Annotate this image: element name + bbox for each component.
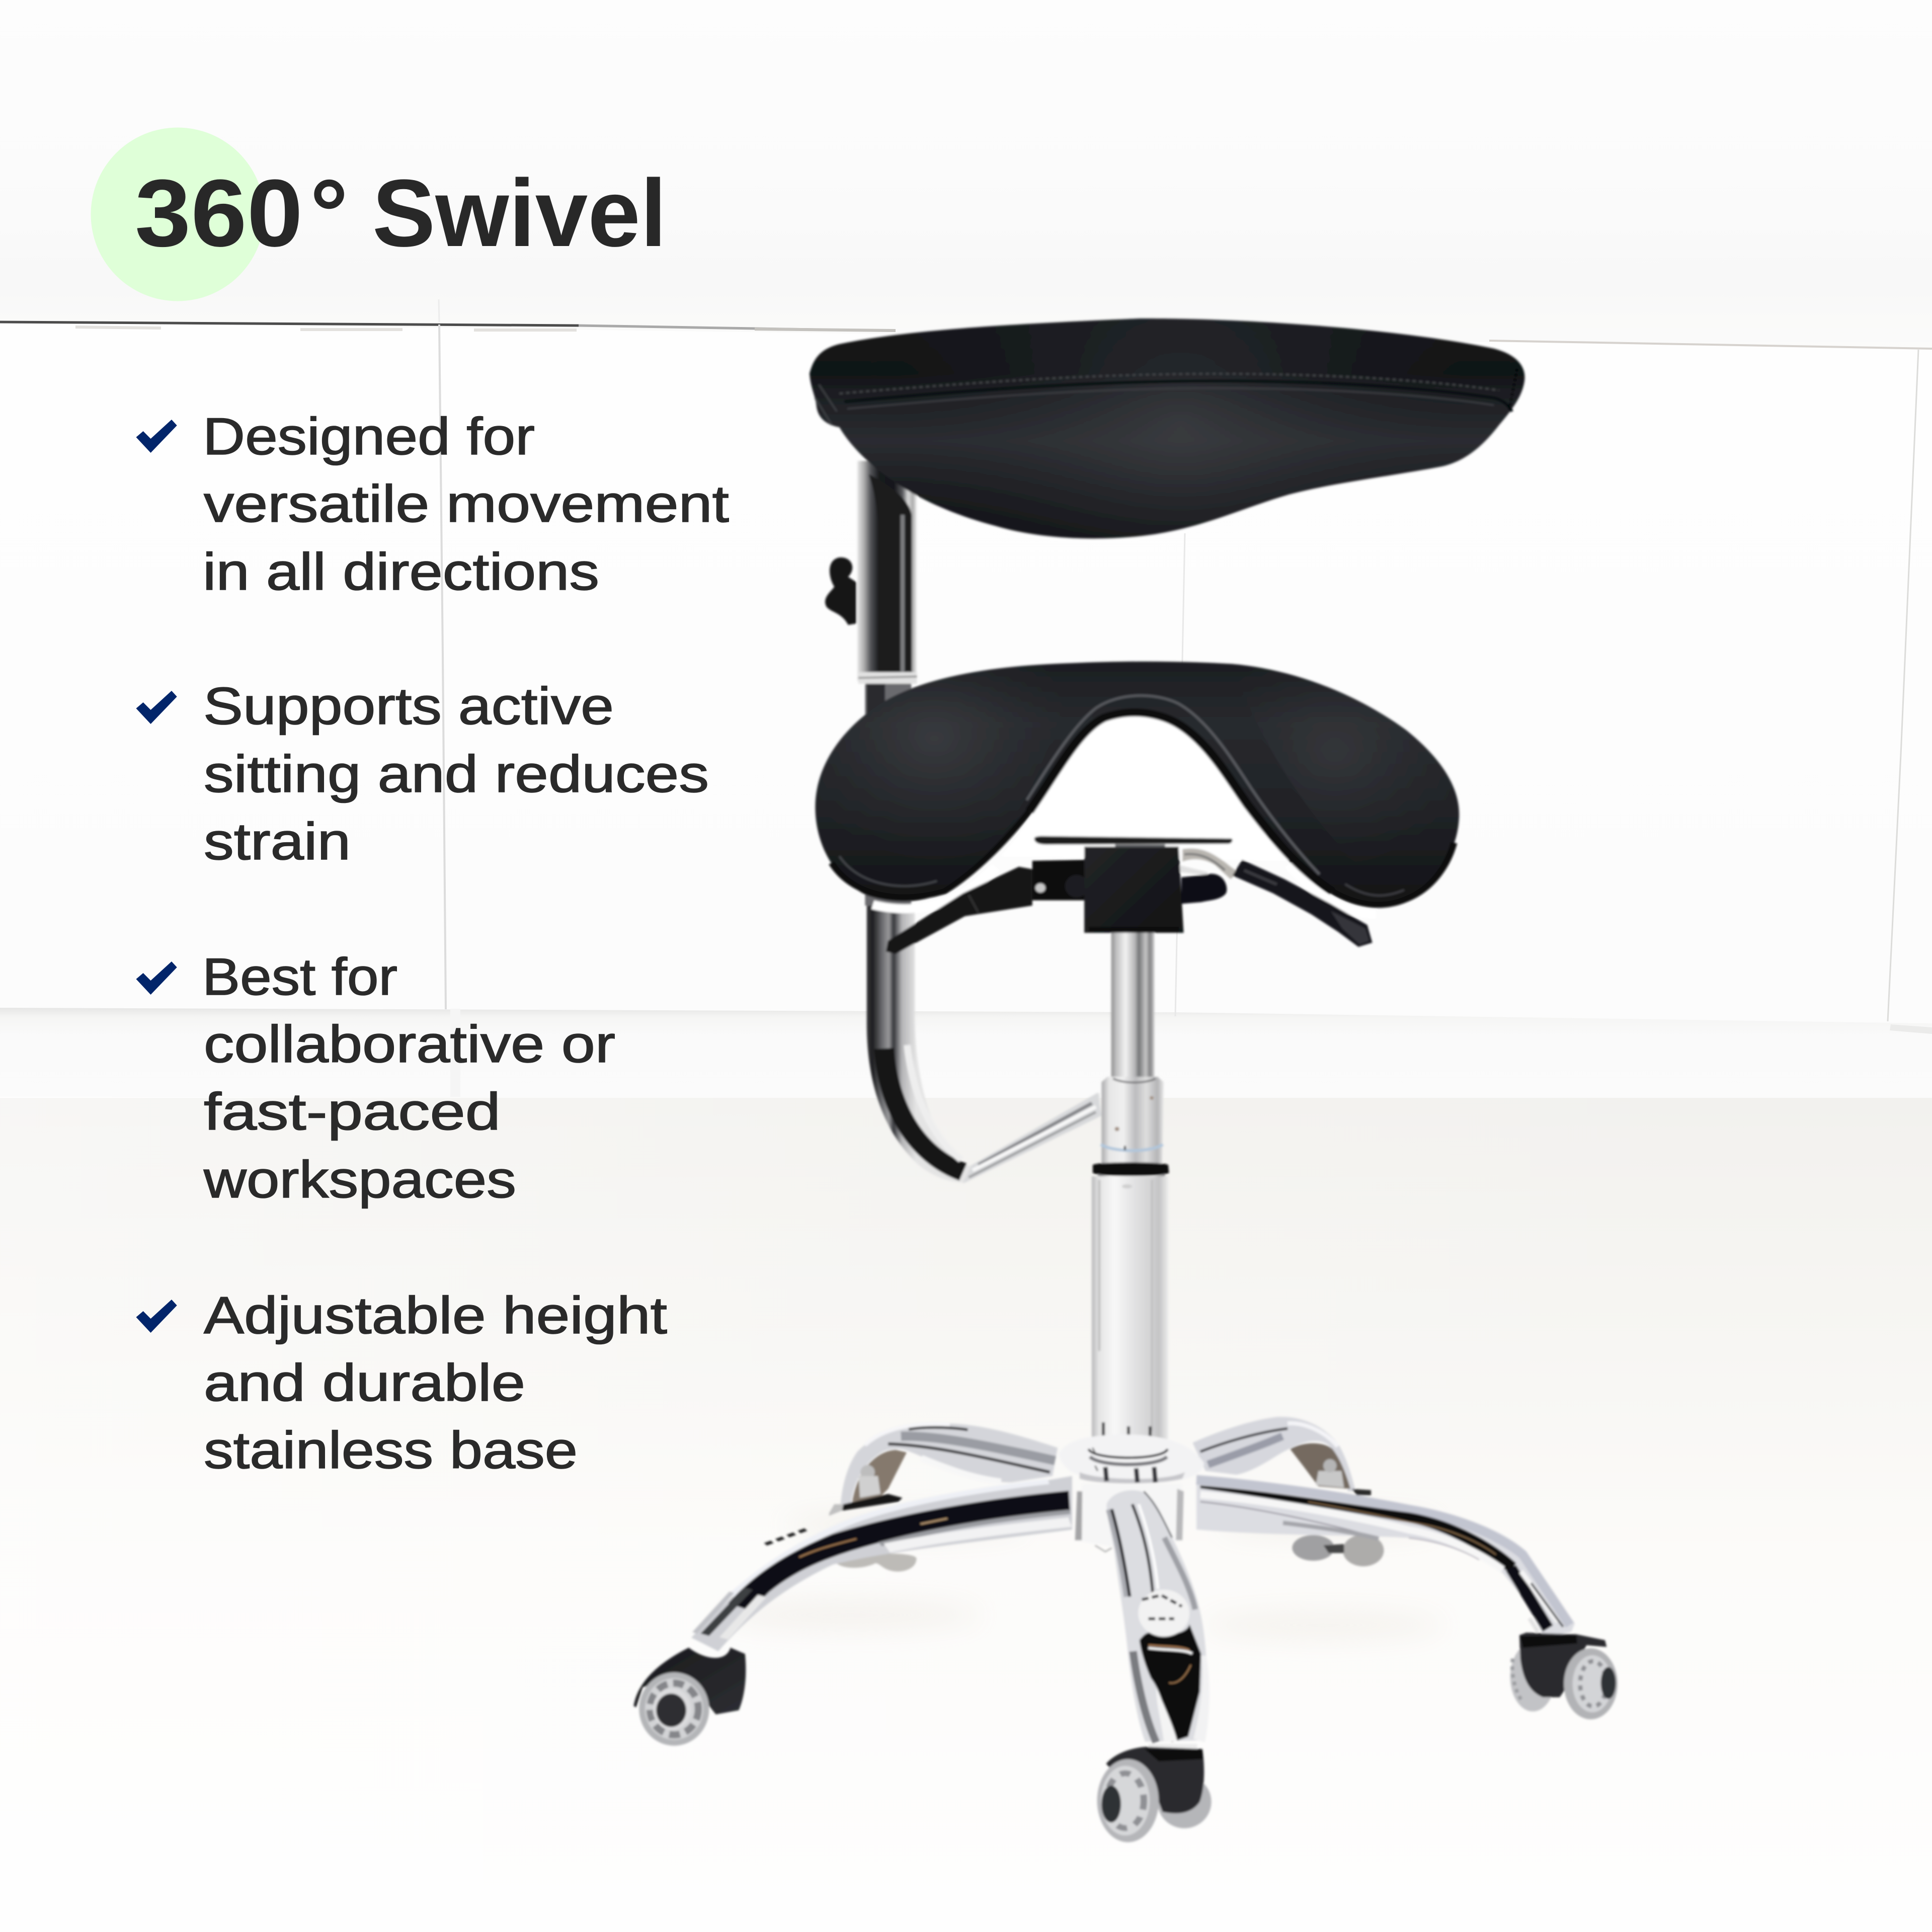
feature 3: Best for xyxy=(202,948,397,1006)
title: ° xyxy=(310,160,348,267)
backrest cushion xyxy=(810,318,1525,538)
feature 3: collaborative or xyxy=(204,1015,615,1074)
front leg xyxy=(1106,1490,1210,1749)
title: Swivel xyxy=(372,160,667,267)
title xyxy=(135,160,667,267)
feature 2: Supports active xyxy=(203,677,614,736)
left front leg xyxy=(691,1476,1072,1651)
rear base legs and wheels xyxy=(829,1417,1384,1572)
front caster xyxy=(1097,1747,1212,1842)
feature 4: Adjustable height xyxy=(204,1286,667,1345)
feature 4: and durable xyxy=(204,1354,525,1412)
right caster xyxy=(1510,1633,1618,1719)
feature 4 xyxy=(136,1286,667,1480)
right front leg xyxy=(1196,1475,1575,1637)
feature 1: versatile movement xyxy=(204,475,729,533)
left caster xyxy=(633,1648,746,1746)
feature 4: stainless base xyxy=(204,1421,578,1480)
feature 3 xyxy=(136,948,615,1209)
feature 3: workspaces xyxy=(203,1151,516,1209)
backrest post and swing arm xyxy=(857,461,1102,1183)
feature 1: in all directions xyxy=(203,543,599,601)
lower gas lift cylinder xyxy=(1092,1176,1168,1458)
base hub xyxy=(1059,1434,1204,1552)
chair photo illustration xyxy=(633,318,1618,1842)
seat height collar and o-ring xyxy=(1093,1077,1169,1179)
saddle seat xyxy=(815,662,1459,915)
feature 2: strain xyxy=(204,813,351,871)
feature 2 xyxy=(136,677,709,871)
feature 3: fast-paced xyxy=(204,1083,501,1141)
feature 1 xyxy=(136,408,729,601)
adjustment knob xyxy=(825,557,856,625)
green accent circle xyxy=(91,128,265,301)
feature 2: sitting and reduces xyxy=(204,745,709,803)
title: 360 xyxy=(135,160,303,267)
feature list xyxy=(136,408,729,1480)
feature 1: Designed for xyxy=(203,408,535,466)
seat mechanism, upper gas lift and levers xyxy=(886,836,1373,1081)
